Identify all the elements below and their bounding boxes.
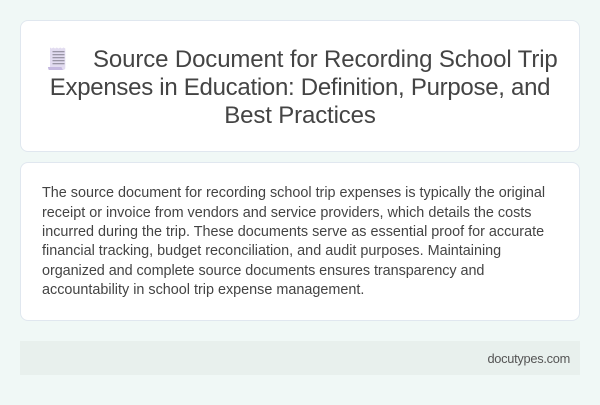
text block: description: incurred during the trip. These documents serve as essential proof for accurate	[42, 224, 544, 240]
text block: description	[42, 185, 545, 298]
panel: description card	[20, 162, 580, 321]
heading: title line 3: Best Practices	[224, 102, 376, 129]
text block: description: financial tracking, budget reconciliation, and audit purposes. Maintaining	[42, 243, 501, 259]
heading: title line 1: Source Document for Recording School Trip	[93, 46, 558, 73]
text block: description: accountability in school trip expense management.	[42, 282, 364, 298]
panel: title card	[20, 20, 580, 152]
footer text: source: docutypes.com	[487, 351, 570, 366]
text block: description: organized and complete source documents ensures transparency and	[42, 263, 484, 279]
footer bar	[20, 341, 580, 375]
text block: description: The source document for recording school trip expenses is typically the original	[42, 185, 545, 201]
text block: description: receipt or invoice from vendors and service providers, which details the costs	[42, 205, 532, 221]
heading: title line 2: Expenses in Education: Definition, Purpose, and	[50, 74, 550, 101]
icon: document receipt	[48, 48, 66, 70]
